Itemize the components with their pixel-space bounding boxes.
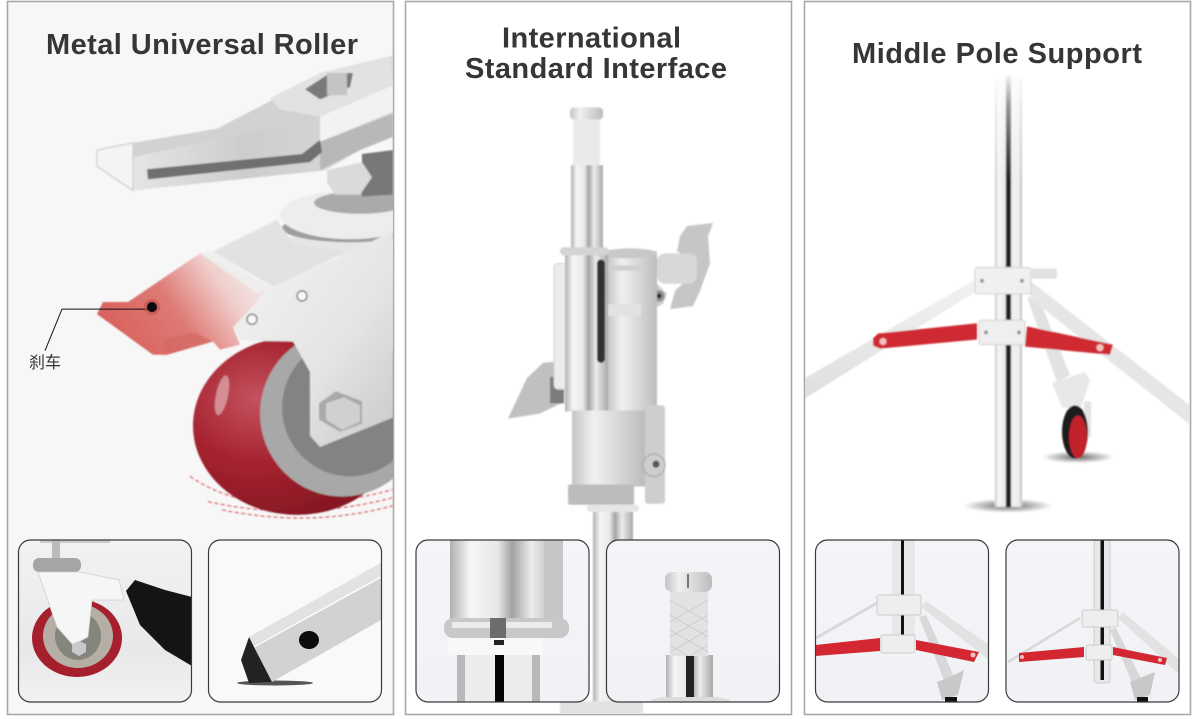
inset: caster with tire	[19, 540, 191, 688]
inset frames	[18, 540, 1179, 702]
ground shadows	[963, 451, 1114, 513]
illustration: caster wheel with brake	[29, 56, 424, 518]
right leg	[1030, 281, 1190, 425]
inset: collar close-up	[416, 540, 590, 702]
pole	[593, 512, 633, 719]
panel: international standard interface	[406, 2, 792, 719]
red braces	[873, 323, 1113, 355]
title: International Standard Interface	[465, 22, 727, 85]
title: International Standard Interface: Standard Interface	[465, 53, 727, 85]
right wing knob	[656, 222, 714, 310]
title: International Standard Interface: International	[502, 22, 681, 54]
handle lever	[97, 56, 393, 191]
inset: tripod with wide brace	[815, 540, 989, 703]
title: Metal Universal Roller: Metal Universal Roller	[46, 29, 358, 61]
callout: brake label	[29, 299, 160, 372]
fork plate	[233, 231, 393, 447]
lower clamp	[979, 320, 1025, 345]
brake pedal	[97, 253, 270, 355]
brake bracket	[213, 220, 347, 287]
lower clamp	[568, 405, 665, 512]
swivel collar and nut	[281, 149, 393, 255]
left leg	[805, 280, 977, 398]
upper clamp	[975, 268, 1057, 294]
wheel	[192, 340, 393, 516]
panel: metal universal roller	[8, 2, 424, 714]
adapter body	[554, 247, 657, 411]
title: Middle Pole Support: Middle Pole Support	[852, 38, 1142, 70]
panel: middle pole support	[804, 2, 1190, 714]
inset: leg tip	[237, 563, 381, 686]
inset: tripod with short pole	[1006, 540, 1180, 703]
dashed motion arcs	[190, 476, 393, 518]
center pole	[995, 76, 1022, 507]
callout: brake label: 刹车	[29, 354, 61, 372]
illustration: tripod and center pole	[805, 71, 1190, 513]
left wing knob	[508, 362, 564, 419]
base fitting	[560, 701, 643, 716]
inset: spigot close-up	[606, 540, 780, 706]
illustration: stand head adapter	[508, 107, 713, 719]
spigot	[570, 107, 603, 249]
rear leg and caster	[1027, 297, 1091, 458]
